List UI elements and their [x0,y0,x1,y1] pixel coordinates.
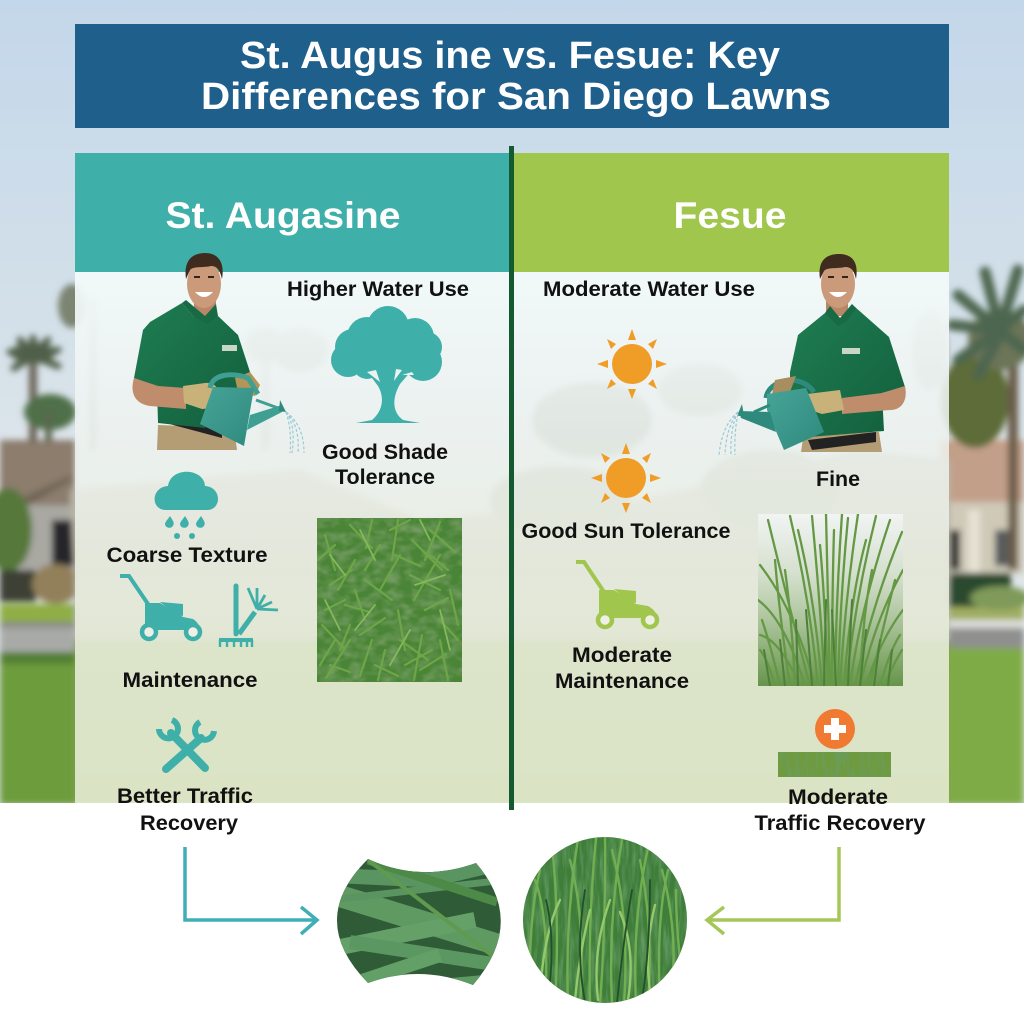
text: Higher Water Use: Higher Water Use [287,278,469,301]
icon: plus badge [815,709,855,749]
figure: worker with watering can, left [132,253,304,453]
left house [0,440,75,505]
faint middle scenery [70,450,950,580]
text: Moderate Maintenance: Maintenance [555,670,689,693]
text: Moderate Maintenance [555,644,689,693]
arrow: left, teal [185,847,317,934]
photo: fine blade close-up [520,835,690,1005]
photo: grass strip [778,752,891,777]
text: Good Sun Tolerance: Good Sun Tolerance [522,520,730,543]
icon: lawn mower, green [576,562,657,627]
title banner: St. Augus ine vs. Fesue: Key [240,35,780,77]
icon: rake [219,586,278,647]
text: Moderate Traffic Recovery: Traffic Recovery [754,812,926,835]
panel: Fescue [514,153,949,803]
heading: St. Augasine: St. Augasine [166,195,400,236]
text: Good Shade Tolerance [322,441,448,489]
text: Better Traffic Recovery [117,785,253,835]
panel: St. Augustine [75,153,510,803]
centre divider [509,146,514,810]
palm right and trees [941,352,1009,448]
text: Fine: Fine [816,468,860,491]
text: Maintenance: Maintenance [122,669,258,692]
text: Good Shade Tolerance: Good Shade [322,441,448,464]
photo: coarse blade close-up [337,859,501,985]
icon: lawn mower [120,576,200,639]
text: Coarse Texture: Coarse Texture [106,544,268,567]
text: Moderate Maintenance: Moderate [572,644,672,667]
white bottom band [0,803,1024,1024]
text: Better Traffic Recovery: Recovery [140,812,238,835]
figure: worker with watering can, right [719,254,906,455]
arrow: right, green [707,847,839,934]
heading: Fesue [514,153,949,272]
title banner: Differences for San Diego Lawns [201,76,831,118]
text: Moderate Traffic Recovery [754,786,926,835]
text: Better Traffic Recovery: Better Traffic [117,785,253,808]
palms left [29,360,37,442]
heading: St. Augasine [75,153,510,272]
photo: fine grass swatch [758,514,903,686]
icon: shade tree [331,306,442,423]
right house [940,440,1024,502]
icon: rain cloud [155,472,218,539]
icon: crossed wrenches [159,720,214,769]
title banner [75,24,949,128]
photo: coarse grass swatch [317,518,462,682]
icon: sun, good sun tolerance [591,443,661,513]
text: Good Shade Tolerance: Tolerance [335,466,435,489]
heading: Fesue: Fesue [674,195,786,236]
icon: sun [597,329,667,399]
text: Moderate Traffic Recovery: Moderate [788,786,888,809]
text: Moderate Water Use: Moderate Water Use [543,278,755,301]
